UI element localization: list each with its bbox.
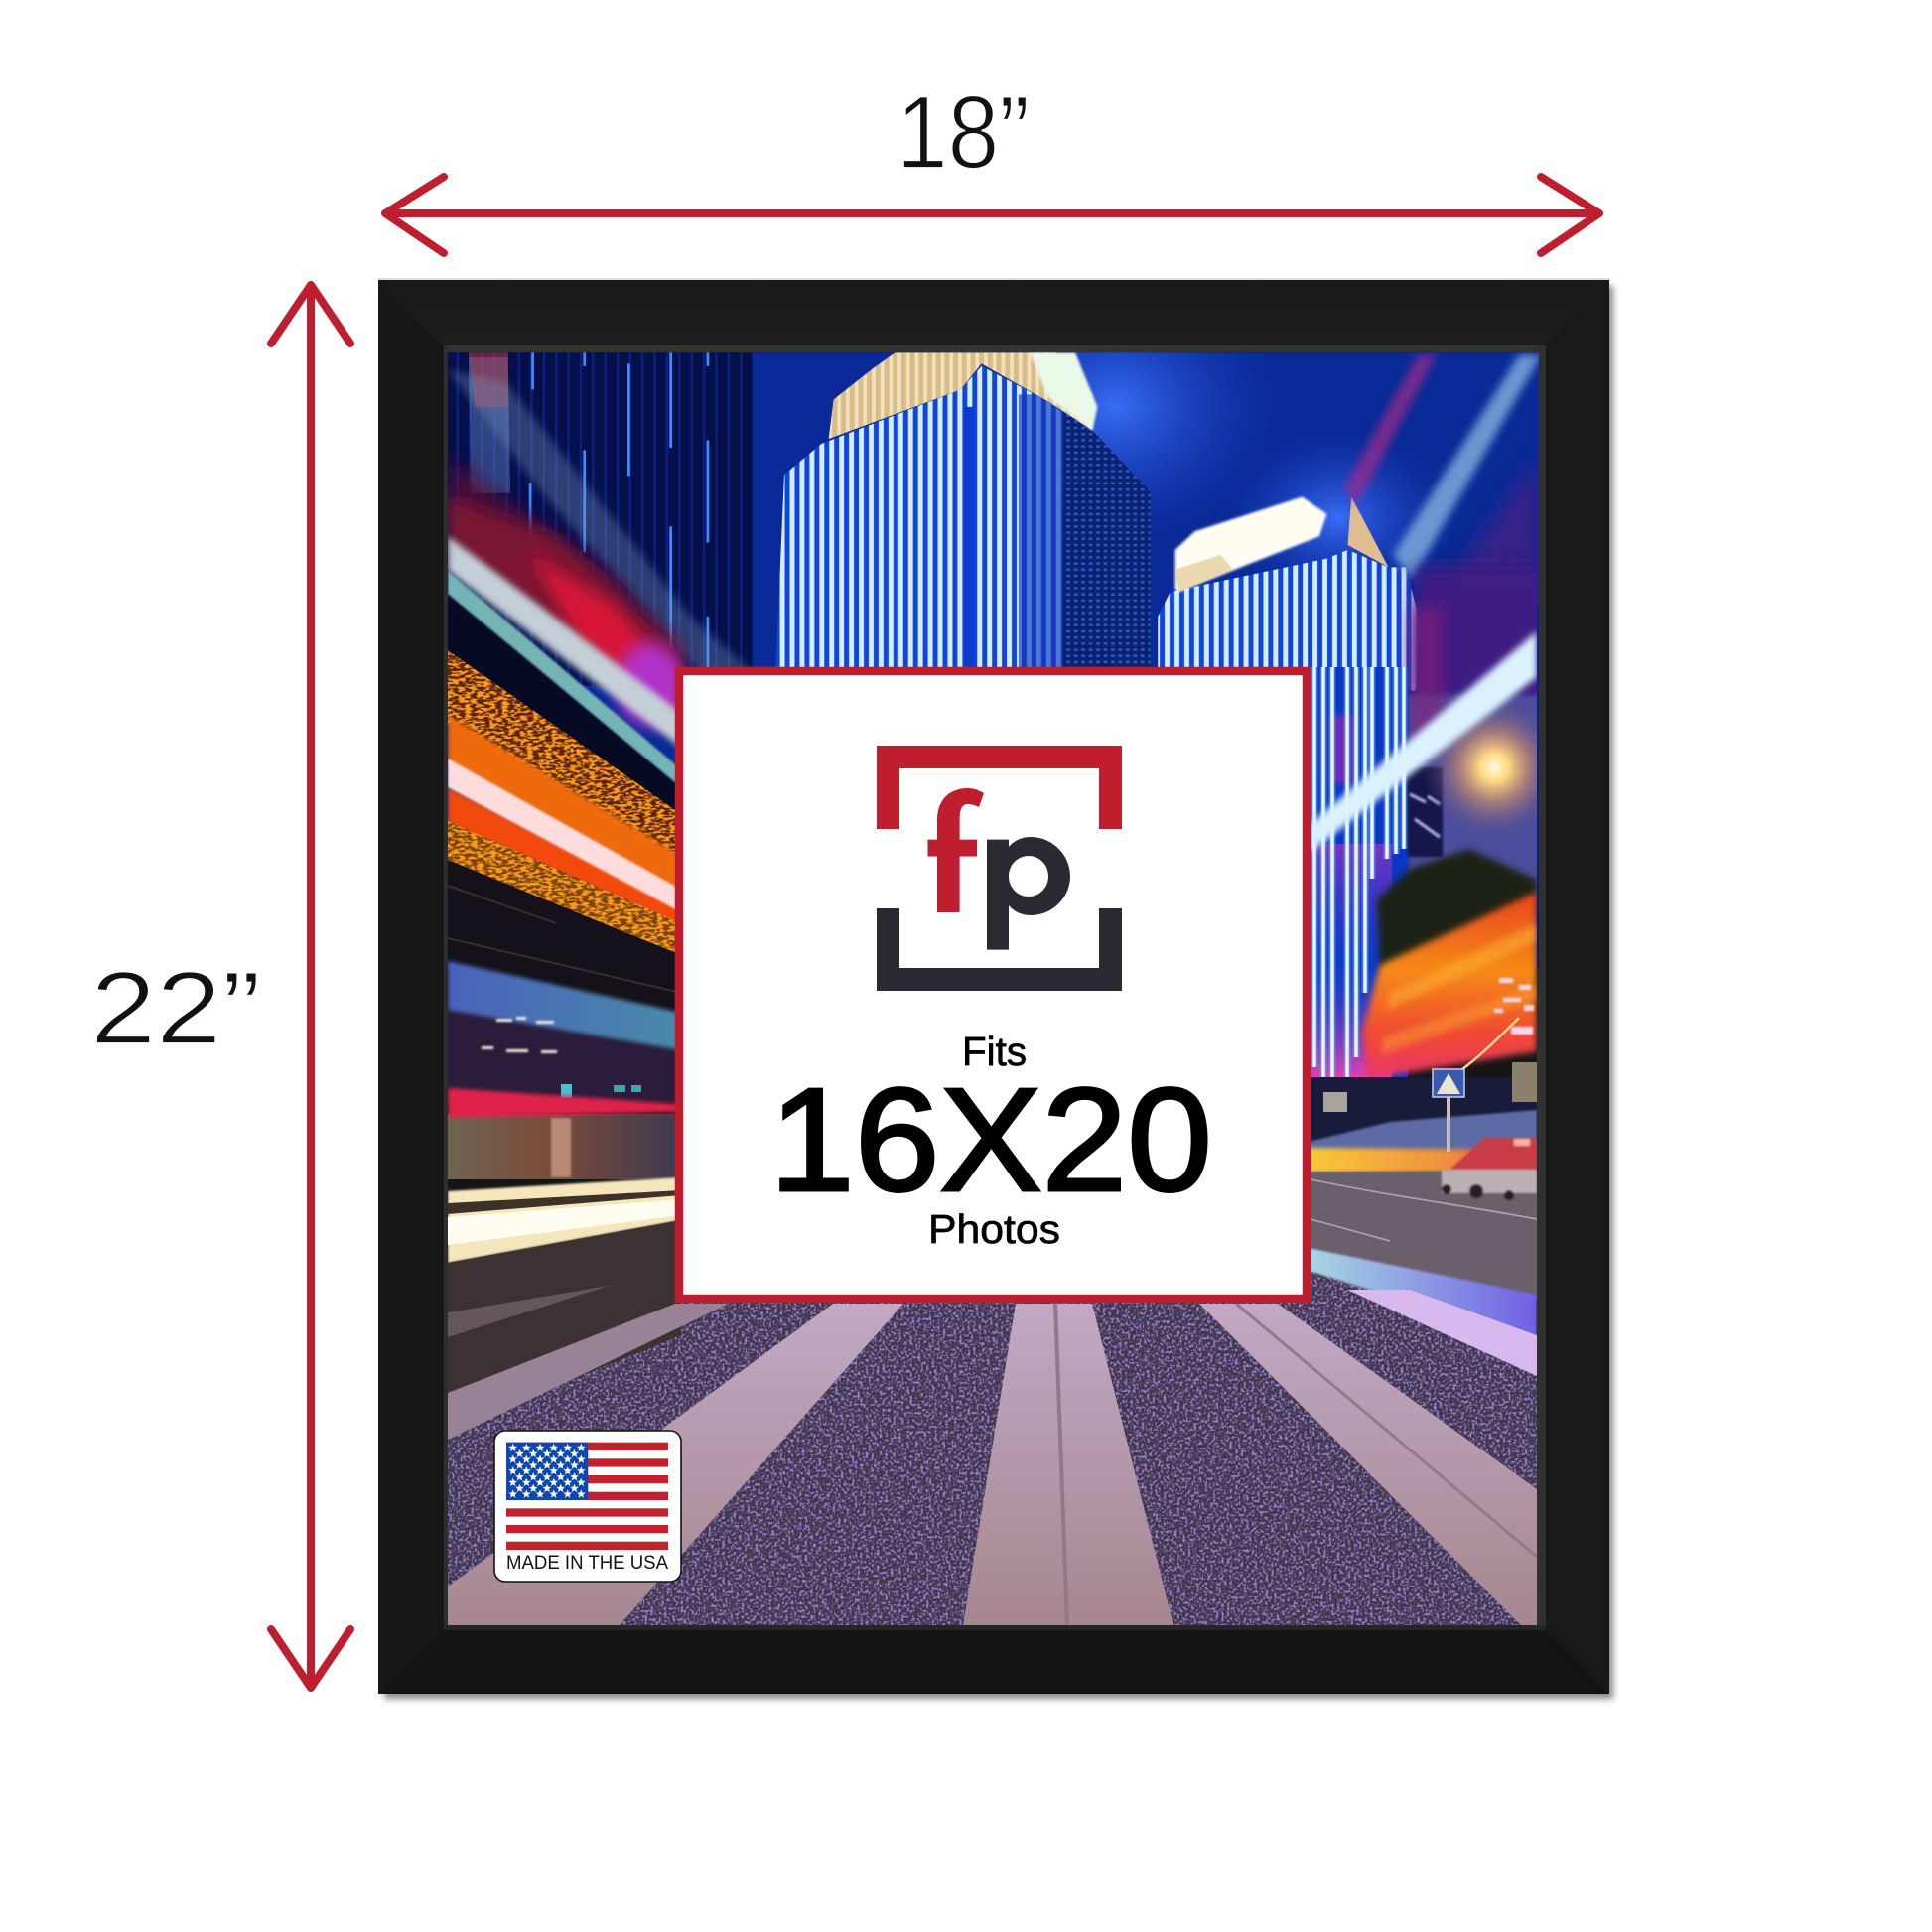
black picture frame bbox=[378, 278, 1609, 1694]
badge caption: MADE IN THE USA bbox=[506, 1553, 668, 1574]
city night photo bbox=[448, 271, 1566, 1625]
letter f bbox=[927, 788, 984, 912]
Photos label: Photos bbox=[928, 1206, 1060, 1252]
made in the USA badge bbox=[494, 1431, 681, 1582]
sun flare bbox=[1428, 707, 1537, 830]
small building bbox=[1408, 767, 1443, 857]
flag canton bbox=[506, 1443, 588, 1500]
frame shadow bbox=[384, 286, 1613, 1699]
central tower bbox=[775, 352, 1151, 672]
tree bbox=[1377, 849, 1537, 973]
white light streak bbox=[1311, 631, 1537, 852]
letter p bbox=[987, 837, 1070, 950]
right lavender road stripe bbox=[1347, 1290, 1537, 1376]
height arrow bbox=[271, 285, 350, 1688]
right road and streak bbox=[1309, 1138, 1537, 1301]
tower light lines bbox=[1314, 667, 1404, 1087]
width dimension 18 inches: 18” bbox=[897, 75, 1030, 191]
car bbox=[1442, 1138, 1537, 1200]
orange band bbox=[1362, 892, 1537, 1079]
right side haze and sky trails bbox=[1344, 355, 1541, 691]
flag stripes bbox=[506, 1443, 668, 1550]
second tower bbox=[1158, 497, 1422, 691]
left dark building bbox=[448, 352, 753, 691]
white logo panel with red border bbox=[679, 671, 1307, 1299]
asphalt bbox=[448, 1269, 1537, 1625]
Fits label: Fits bbox=[962, 1029, 1027, 1074]
red upper bracket bbox=[877, 746, 1122, 829]
road sign bbox=[1433, 1069, 1464, 1097]
street level scene bbox=[1309, 1062, 1537, 1173]
upper skyline bbox=[447, 352, 1539, 969]
fp logo bbox=[877, 746, 1122, 991]
right purple streak bbox=[1309, 1248, 1537, 1342]
road stripes bbox=[448, 1304, 1537, 1625]
left motion streaks bbox=[448, 496, 684, 1430]
width arrow bbox=[385, 177, 1599, 253]
dark lower bracket bbox=[877, 908, 1122, 991]
size heading 16X20: 16X20 bbox=[769, 1058, 1212, 1222]
height dimension 22 inches: 22” bbox=[90, 951, 261, 1066]
lower photo, road and light trails bbox=[448, 496, 1566, 1625]
sky bbox=[448, 352, 1539, 969]
right sky and tower bbox=[1311, 555, 1537, 1172]
